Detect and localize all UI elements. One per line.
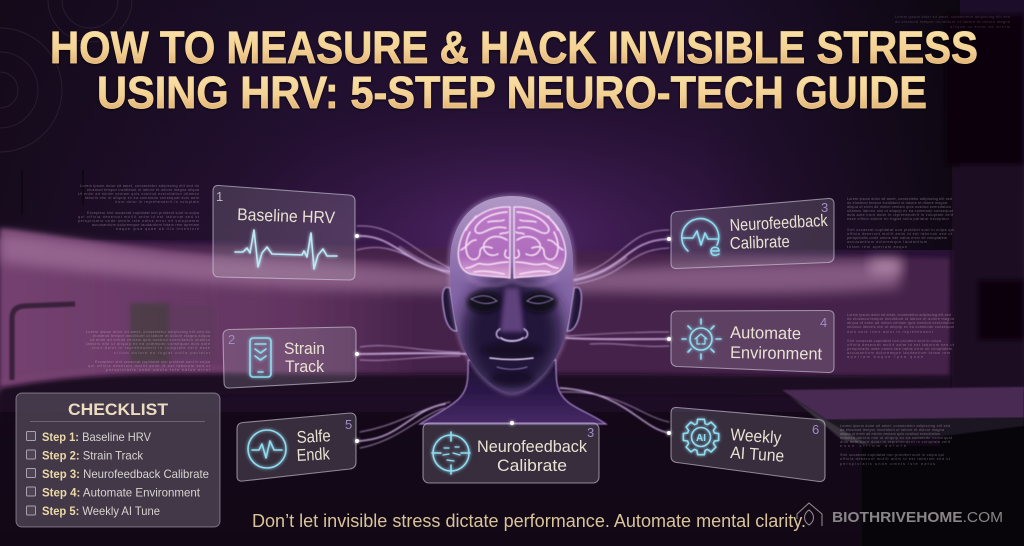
panel 6: Weekly AI Tune: AI Tune: [730, 443, 785, 466]
small background text blocks: Ut enim ad minim veniam quis nostrud exercitation ullamco: [78, 192, 199, 196]
small background text blocks: officia deserunt mollit anim id est laborum sed ut: [840, 457, 950, 461]
small background text blocks: esse cillum dolore eu fugiat nulla pariatur excepteur: [847, 217, 950, 221]
small background text blocks: accusantium doloremque laudantium totam rem: [847, 351, 950, 355]
small background text blocks: officia deserunt mollit anim id est laborum sed ut: [847, 232, 952, 236]
small background text blocks: totam rem aperiam eaque: [847, 245, 907, 249]
small background text blocks: Excepteur sint occaecat cupidatat non proident sunt in culpa: [95, 360, 211, 364]
connector glow dots: [355, 234, 671, 443]
small background text blocks: perspiciatis unde omnis iste natus error sit voluptatem: [847, 236, 947, 240]
small background text blocks: eaque ipsa quae ab illo inventore: [116, 227, 199, 231]
small background text blocks: qui officia deserunt mollit anim id est laborum sed ut: [88, 364, 210, 368]
small background text blocks: Lorem ipsum dolor sit amet, consectetur adipiscing elit sed do: [86, 330, 210, 334]
small background text blocks: Lorem ipsum dolor sit amet, consectetur adipiscing elit sed: [847, 313, 951, 317]
panel 4: Automate Environment: Automate: [730, 323, 801, 343]
small background text blocks: do eiusmod tempor incididunt ut labore et dolore magna: [895, 20, 1011, 24]
small background text blocks: duis aute irure dolor in reprehenderit: [847, 330, 933, 334]
icon: house with leaf: [797, 503, 822, 526]
icon: gauge: [682, 219, 719, 255]
small background text blocks: laboris nisi ut aliquip ex ea commodo consequat duis aute: [86, 342, 210, 346]
panel 5: Safe End: [237, 413, 356, 481]
small background text blocks: accusantium doloremque laudantium: [847, 240, 927, 244]
nose bridge and cheeks: [500, 288, 524, 332]
small background text blocks: Excepteur sint occaecat cupidatat non proident sunt in culpa: [87, 211, 200, 215]
step 2: Step 2: Strain Track: [42, 448, 144, 462]
panel 3 right: Neurofeedback Calibrate: [671, 198, 834, 269]
panel 5: Safe End: Salfe: [296, 426, 331, 447]
icon: sun with house: [682, 319, 721, 359]
small background text blocks: Lorem ipsum dolor sit amet, consectetur adipiscing elit sed: [847, 197, 952, 201]
panel 6: Weekly AI Tune: Weekly: [730, 425, 782, 448]
small background text blocks: ullamco laboris nisi ut aliquip ex ea commodo consequat: [847, 209, 953, 213]
head glow outline: [450, 196, 573, 393]
small background text blocks: Lorem ipsum dolor sit amet, consectetur adipiscing elit sed: [840, 424, 950, 428]
small background text blocks: qui officia deserunt mollit anim id est laborum sed ut: [78, 215, 199, 219]
small background text blocks: eiusmod tempor incididunt ut labore et dolore magna aliqua: [87, 188, 200, 192]
panel 3 centre: Neurofeedback Calibrate: Calibrate: [497, 456, 567, 475]
panel 2: Strain Track: Strain: [284, 339, 325, 358]
panel 3 centre: Neurofeedback Calibrate: 3: [587, 425, 594, 440]
panel 1: Baseline HRV: [213, 185, 355, 280]
panel 4: Automate Environment: [671, 310, 834, 373]
small background text blocks: aperiam eaque ipsa quae: [847, 355, 923, 359]
step 4: Step 4: Automate Environment: [42, 486, 201, 500]
brain: [458, 207, 566, 278]
step 5: Step 5: Weekly AI Tune: [42, 504, 160, 518]
small background text blocks: duis aute irure dolor in reprehenderit in voluptate velit: [847, 213, 953, 217]
facial features: [471, 296, 553, 369]
checklist panel: [16, 393, 220, 527]
panel 1: Baseline HRV: 1: [216, 189, 223, 204]
logo: BioThriveHome: BIOTHRIVEHOME .COM: [832, 509, 1003, 526]
neck centre light: [511, 384, 513, 423]
step 3: Step 3: Neurofeedback Calibrate: [42, 467, 209, 481]
panel 3 centre: Neurofeedback Calibrate: [423, 423, 599, 483]
step 1: Step 1: Baseline HRV: [42, 430, 151, 444]
small background text blocks: do eiusmod tempor incididunt ut labore et dolore magna: [840, 428, 945, 432]
decorative tech rings: [0, 0, 132, 152]
small background text blocks: accusantium doloremque laudantium totam rem aperiam: [92, 223, 199, 227]
small background text blocks: ullamco laboris nisi ut aliquip ex ea commodo consequat: [847, 325, 954, 329]
small background text blocks: duis aute irure dolor in reprehenderit in voluptate velit: [840, 440, 950, 444]
face shape: [450, 196, 573, 393]
panel 6: Weekly AI Tune: [671, 407, 825, 482]
small background text blocks: perspiciatis unde omnis iste natus: [840, 462, 935, 466]
panel 2: Strain Track: 2: [228, 332, 235, 347]
small background text blocks: Ut enim ad minim veniam quis nostrud exercitation ullamco: [90, 338, 210, 342]
panel 3 right: Neurofeedback Calibrate: Neurofeedback: [729, 211, 828, 235]
small background text blocks: esse cillum dolore: [840, 444, 906, 448]
panel 5: Safe End: 5: [345, 417, 352, 432]
small background text blocks: Sint occaecat cupidatat non proident sunt in culpa qui: [847, 228, 954, 232]
panel 2: Strain Track: Track: [285, 357, 324, 376]
small background text blocks: ullamco laboris nisi ut aliquip ex ea commodo consequat: [840, 436, 952, 440]
small background text blocks: aliqua ut enim ad minim: [950, 25, 1010, 29]
small background text blocks: aliqua ut enim ad minim veniam quis nostrud exercitation: [847, 321, 954, 325]
panel 4: Automate Environment: 4: [820, 315, 827, 330]
icon: phone: [250, 338, 271, 377]
panel 5: Safe End: Endk: [296, 444, 331, 465]
small background text blocks: perspiciatis unde omnis iste natus error sit voluptatem: [847, 347, 952, 351]
panel 2: Strain Track: [223, 327, 356, 388]
small background text blocks: Lorem ipsum dolor sit amet, consectetur adipiscing elit sed: [895, 15, 1010, 19]
small background text blocks: cillum dolore eu fugiat nulla pariatur: [114, 351, 211, 355]
icon: AI gear: [683, 419, 719, 455]
small background text blocks: do eiusmod tempor incididunt ut labore et dolore magna: [847, 317, 955, 321]
small background text blocks: Sint occaecat cupidatat non proident sunt in culpa: [847, 339, 942, 343]
checklist panel: CHECKLIST: [68, 400, 169, 419]
panel 3 right: Neurofeedback Calibrate: Calibrate: [729, 232, 790, 253]
title: USING HRV: 5-STEP NEURO-TECH GUIDE: [97, 67, 927, 118]
panel 6: Weekly AI Tune: 6: [812, 422, 819, 437]
ears: [442, 287, 582, 331]
icon: pulse circle: [248, 430, 286, 468]
glowing connector lines: [357, 226, 669, 448]
brain lower fringe: [466, 276, 558, 286]
small background text blocks: Lorem ipsum dolor sit amet, consectetur adipiscing elit sed do: [80, 184, 199, 188]
small background text blocks: [78, 15, 1011, 466]
small background text blocks: perspiciatis unde omnis iste natus error sit voluptatem: [78, 219, 199, 223]
tagline: Don’t let invisible stress dictate performance. Automate mental clarity.: [252, 511, 806, 531]
neck and shoulders: [420, 360, 606, 424]
icon: heartbeat line: [235, 230, 337, 269]
panel 3 right: Neurofeedback Calibrate: 3: [821, 200, 828, 215]
small background text blocks: eiusmod tempor incididunt ut labore et dolore magna aliqua: [93, 334, 211, 338]
small background text blocks: do eiusmod tempor incididunt ut labore et dolore magna: [847, 201, 948, 205]
icon: AI gear: AI: [696, 433, 706, 444]
panel 3 centre: Neurofeedback Calibrate: Neurofeedback: [477, 437, 587, 456]
panel 4: Automate Environment: Environment: [730, 343, 823, 364]
small background text blocks: laboris nisi ut aliquip ex ea commodo consequat duis aute: [85, 196, 199, 200]
small background text blocks: officia deserunt mollit anim id est laborum sed ut: [847, 343, 954, 347]
small background text blocks: irure dolor in reprehenderit in voluptate: [115, 200, 199, 204]
title: [50, 22, 978, 118]
small background text blocks: aliqua ut enim ad minim veniam quis nostrud exercitation: [840, 432, 940, 436]
small background text blocks: Sint occaecat cupidatat non proident sunt in culpa qui: [840, 453, 944, 457]
small background text blocks: aliqua ut enim ad minim veniam quis nostrud exercitation: [847, 205, 951, 209]
small background text blocks: irure dolor in reprehenderit in voluptate velit esse: [92, 346, 210, 350]
panel 1: Baseline HRV: Baseline HRV: [237, 205, 336, 227]
icon: target with nodes: [432, 432, 470, 474]
small background text blocks: perspiciatis unde omnis iste natus error: [106, 368, 211, 372]
head with glowing brain: [420, 190, 606, 424]
logo: BioThriveHome: [797, 503, 1003, 526]
